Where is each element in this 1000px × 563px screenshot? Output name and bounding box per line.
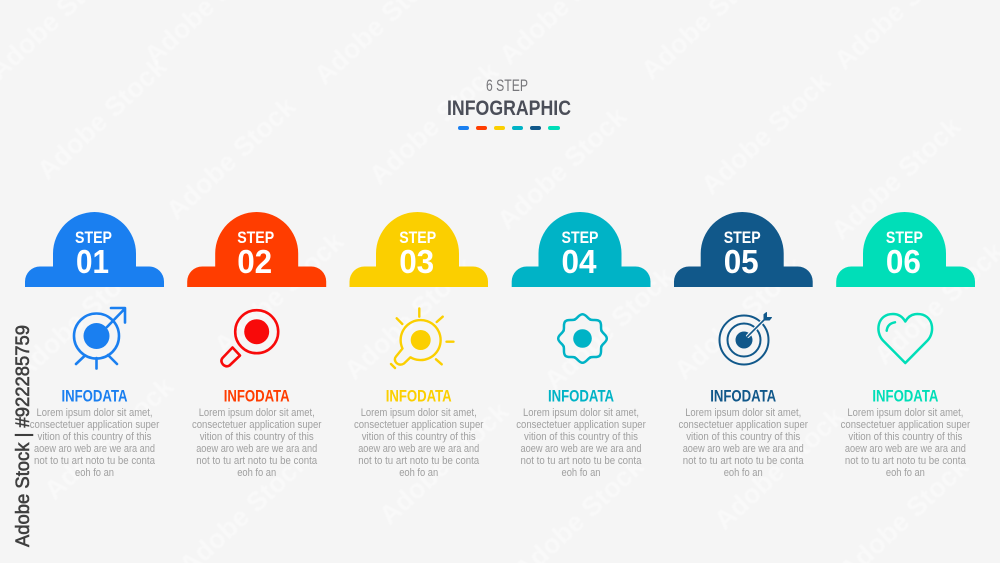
step 05 tab bbox=[674, 212, 813, 287]
title: 6 step: 6 STEP bbox=[486, 77, 528, 95]
watermark pattern: Adobe Stock bbox=[668, 251, 810, 386]
body text: Lorem ipsum dolor sit amet, bbox=[523, 407, 639, 419]
heading: INFODATA bbox=[224, 388, 290, 406]
body text: aoew aro web are we ara and bbox=[520, 443, 642, 455]
step 01 tab: 01 bbox=[76, 243, 109, 280]
body text: Lorem ipsum dolor sit amet, bbox=[361, 407, 477, 419]
step 03 tab: 03 bbox=[399, 243, 434, 280]
body text: vition of this country of this bbox=[362, 431, 476, 443]
step 04 tab bbox=[512, 212, 650, 287]
heading: INFODATA bbox=[872, 388, 938, 406]
body text bbox=[678, 407, 808, 479]
step 01 tab: STEP bbox=[75, 228, 112, 247]
watermark pattern: Adobe Stock bbox=[38, 371, 180, 506]
body text: vition of this country of this bbox=[38, 431, 152, 443]
watermark pattern: Adobe Stock bbox=[208, 226, 350, 361]
watermark pattern: Adobe Stock bbox=[373, 396, 515, 531]
body text: consectetuer application super bbox=[841, 419, 971, 431]
icon: magnifier bbox=[221, 310, 278, 366]
body text: not to tu art noto tu be conta bbox=[683, 455, 804, 467]
stock id caption: Adobe Stock | #922285759 bbox=[13, 325, 34, 547]
panel: step 02 bbox=[187, 212, 326, 479]
body text: not to tu art noto tu be conta bbox=[196, 455, 317, 467]
body text: aoew aro web are we ara and bbox=[196, 443, 317, 455]
body text bbox=[841, 407, 971, 479]
body text: Lorem ipsum dolor sit amet, bbox=[36, 407, 153, 419]
body text: eoh fo an bbox=[562, 467, 601, 479]
panel: step 05 bbox=[674, 212, 813, 479]
step 03 tab bbox=[350, 212, 488, 287]
step 04 tab: STEP bbox=[562, 228, 598, 247]
watermark pattern: Adobe Stock bbox=[695, 66, 837, 201]
body text: vition of this country of this bbox=[200, 431, 314, 443]
watermark pattern: Adobe Stock bbox=[825, 111, 967, 246]
watermark pattern: Adobe Stock bbox=[363, 56, 505, 191]
panel: step 04 bbox=[512, 212, 650, 479]
body text: consectetuer application super bbox=[354, 419, 484, 431]
body text: consectetuer application super bbox=[678, 419, 808, 431]
heading: INFODATA bbox=[710, 388, 776, 406]
step 06 tab: 06 bbox=[886, 243, 921, 280]
body text: aoew aro web are we ara and bbox=[683, 443, 804, 455]
step 03 tab: STEP bbox=[399, 228, 436, 247]
body text bbox=[30, 407, 160, 479]
body text: not to tu art noto tu be conta bbox=[34, 455, 155, 467]
body text bbox=[192, 407, 322, 479]
title colour dashes bbox=[458, 126, 560, 130]
watermark pattern: Adobe Stock bbox=[31, 51, 173, 186]
body text: eoh fo an bbox=[886, 467, 925, 479]
panel: step 01 bbox=[25, 212, 164, 479]
title: infographic: INFOGRAPHIC bbox=[447, 97, 571, 120]
title block bbox=[447, 77, 571, 130]
step 05 tab: 05 bbox=[724, 243, 759, 280]
watermark pattern: Adobe Stock bbox=[708, 401, 850, 536]
step 06 tab: STEP bbox=[886, 228, 923, 247]
body text: vition of this country of this bbox=[524, 431, 638, 443]
icon: target with arrow bbox=[720, 312, 772, 364]
watermark pattern: Adobe Stock bbox=[160, 91, 302, 226]
heading: INFODATA bbox=[548, 388, 614, 406]
panel: step 03 bbox=[350, 212, 488, 479]
body text: not to tu art noto tu be conta bbox=[845, 455, 966, 467]
body text: consectetuer application super bbox=[516, 419, 646, 431]
body text bbox=[354, 407, 484, 479]
body text: vition of this country of this bbox=[848, 431, 962, 443]
step 01 tab bbox=[25, 212, 164, 287]
step 06 tab bbox=[836, 212, 975, 287]
body text: eoh fo an bbox=[724, 467, 763, 479]
body text bbox=[516, 407, 646, 479]
body text: not to tu art noto tu be conta bbox=[520, 455, 642, 467]
icon: male symbol target bbox=[74, 308, 125, 368]
body text: consectetuer application super bbox=[192, 419, 322, 431]
body text: eoh fo an bbox=[75, 467, 114, 479]
icon: badge gear bbox=[558, 314, 607, 363]
body text: Lorem ipsum dolor sit amet, bbox=[199, 407, 315, 419]
heading: INFODATA bbox=[62, 388, 128, 406]
body text: aoew aro web are we ara and bbox=[358, 443, 479, 455]
body text: vition of this country of this bbox=[686, 431, 800, 443]
watermark pattern: Adobe Stock bbox=[538, 261, 680, 396]
body text: not to tu art noto tu be conta bbox=[358, 455, 479, 467]
body text: aoew aro web are we ara and bbox=[34, 443, 155, 455]
step 04 tab: 04 bbox=[562, 243, 597, 280]
watermark pattern: Adobe Stock bbox=[338, 251, 480, 386]
step 02 tab: 02 bbox=[237, 243, 272, 280]
icon: light bulb bbox=[391, 308, 454, 368]
watermark pattern: Adobe Stock bbox=[8, 251, 150, 386]
body text: aoew aro web are we ara and bbox=[845, 443, 966, 455]
step 02 tab bbox=[187, 212, 326, 287]
panel: step 06 bbox=[836, 212, 975, 479]
body text: eoh fo an bbox=[399, 467, 438, 479]
step 02 tab: STEP bbox=[237, 228, 274, 247]
body text: eoh fo an bbox=[237, 467, 276, 479]
body text: consectetuer application super bbox=[30, 419, 160, 431]
body text: Lorem ipsum dolor sit amet, bbox=[847, 407, 963, 419]
body text: Lorem ipsum dolor sit amet, bbox=[685, 407, 801, 419]
watermark pattern: Adobe Stock bbox=[491, 101, 633, 236]
icon: heart bbox=[878, 314, 932, 363]
step 05 tab: STEP bbox=[724, 228, 761, 247]
heading: INFODATA bbox=[386, 388, 452, 406]
